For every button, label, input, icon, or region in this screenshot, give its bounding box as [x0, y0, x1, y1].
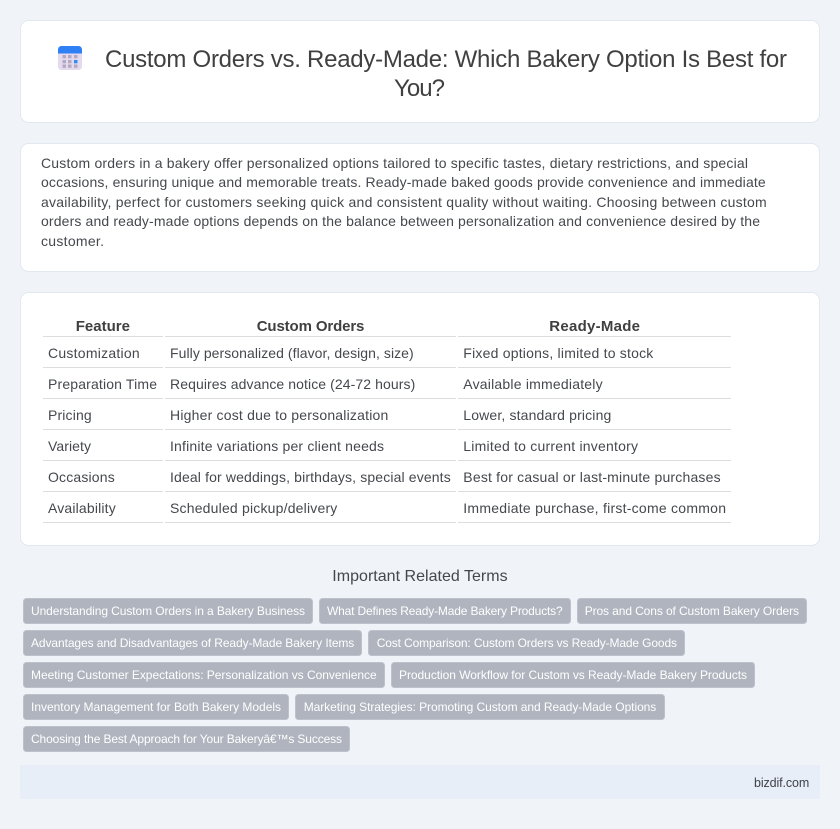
table row: variety: Limited to current inventory: [463, 438, 638, 454]
tag: marketing strategies: Marketing Strategies: Promoting Custom and Ready-Made Options: [304, 700, 656, 714]
table row: preparation time: Available immediately: [463, 376, 603, 392]
tag: choosing the best approach: [24, 726, 350, 752]
table header row: Custom Orders: [257, 318, 364, 335]
tag: cost comparison: [368, 630, 684, 656]
text block: introduction paragraph: Custom orders in a bakery offer personalized options tailored to specific tastes, dietary restrictions, and special: [41, 155, 748, 171]
table row: pricing: Higher cost due to personalization: [170, 407, 388, 423]
panel: comparison table: [20, 292, 820, 546]
text block: introduction paragraph: availability, perfect for customers seeking quick and consistent quality without waiting. Choosing between custom: [41, 194, 767, 210]
tag: customer expectations: [24, 662, 384, 688]
table row: availability: [48, 500, 726, 516]
table row: availability: Immediate purchase, first-come common: [463, 500, 726, 516]
tag: production workflow: [392, 662, 754, 688]
text block: introduction paragraph: customer.: [41, 233, 104, 249]
panel: introduction: [20, 144, 820, 272]
tag: advantages and disadvantages: Advantages and Disadvantages of Ready-Made Bakery Items: [31, 636, 354, 650]
tag: inventory management: Inventory Management for Both Bakery Models: [31, 700, 281, 714]
table row: customization: Customization: [48, 345, 140, 361]
tag: inventory management: [24, 694, 288, 720]
table row: pricing: Lower, standard pricing: [463, 407, 611, 423]
tag: advantages and disadvantages: [24, 630, 362, 656]
text block: introduction paragraph: orders and ready-made options depends on the balance between personalization and convenience desired by the: [41, 213, 760, 229]
table row: occasions: Ideal for weddings, birthdays, special events: [170, 469, 451, 485]
heading: important related terms: Important Related Terms: [332, 568, 508, 585]
table row: variety: [48, 438, 638, 454]
table row: preparation time: Requires advance notice (24-72 hours): [170, 376, 415, 392]
table row: occasions: Best for casual or last-minute purchases: [463, 469, 721, 485]
panel: title card: [20, 20, 820, 122]
tag: production workflow: Production Workflow for Custom vs Ready-Made Bakery Products: [399, 668, 747, 682]
table row: occasions: Occasions: [48, 469, 115, 485]
table row: preparation time: [48, 376, 603, 392]
table row: availability: Scheduled pickup/delivery: [170, 500, 337, 516]
text block: introduction paragraph: occasions, ensuring unique and memorable treats. Ready-made baked goods provide convenience and immediate: [41, 174, 766, 190]
table header row: Ready-Made: [549, 318, 640, 335]
tag: choosing the best approach: Choosing the Best Approach for Your Bakeryâ€™s Success: [31, 732, 342, 746]
table row: availability: Availability: [48, 500, 116, 516]
table row: customization: Fixed options, limited to stock: [463, 345, 654, 361]
table row: customization: [48, 345, 654, 361]
table row: variety: Infinite variations per client needs: [170, 438, 384, 454]
tag: cost comparison: Cost Comparison: Custom Orders vs Ready-Made Goods: [377, 636, 677, 650]
title: You?: [394, 75, 445, 102]
title: Custom Orders vs. Ready-Made: Which Bakery Option Is Best for: [105, 46, 787, 73]
tag: pros and cons: Pros and Cons of Custom Bakery Orders: [585, 604, 799, 618]
panel: related term tags: [24, 598, 806, 752]
table row: pricing: [48, 407, 611, 423]
footer bar: bizdif.com: [754, 776, 809, 790]
table row: variety: Variety: [48, 438, 91, 454]
tag: marketing strategies: [296, 694, 664, 720]
footer bar: [20, 765, 820, 799]
title: [105, 46, 787, 102]
table row: customization: Fully personalized (flavor, design, size): [170, 345, 414, 361]
table row: pricing: Pricing: [48, 407, 92, 423]
tag: customer expectations: Meeting Customer Expectations: Personalization vs Convenience: [31, 668, 377, 682]
tag: understanding custom orders: Understanding Custom Orders in a Bakery Business: [31, 604, 305, 618]
table row: preparation time: Preparation Time: [48, 376, 157, 392]
text block: introduction paragraph: [41, 155, 767, 249]
tag: ready-made definition: What Defines Ready-Made Bakery Products?: [327, 604, 563, 618]
icon: calendar: [58, 46, 82, 70]
table header row: [76, 318, 640, 335]
table row: occasions: [48, 469, 721, 485]
tag: ready-made definition: [320, 598, 570, 624]
tag: pros and cons: [578, 598, 806, 624]
tag: understanding custom orders: [24, 598, 312, 624]
table header row: Feature: [76, 318, 130, 335]
